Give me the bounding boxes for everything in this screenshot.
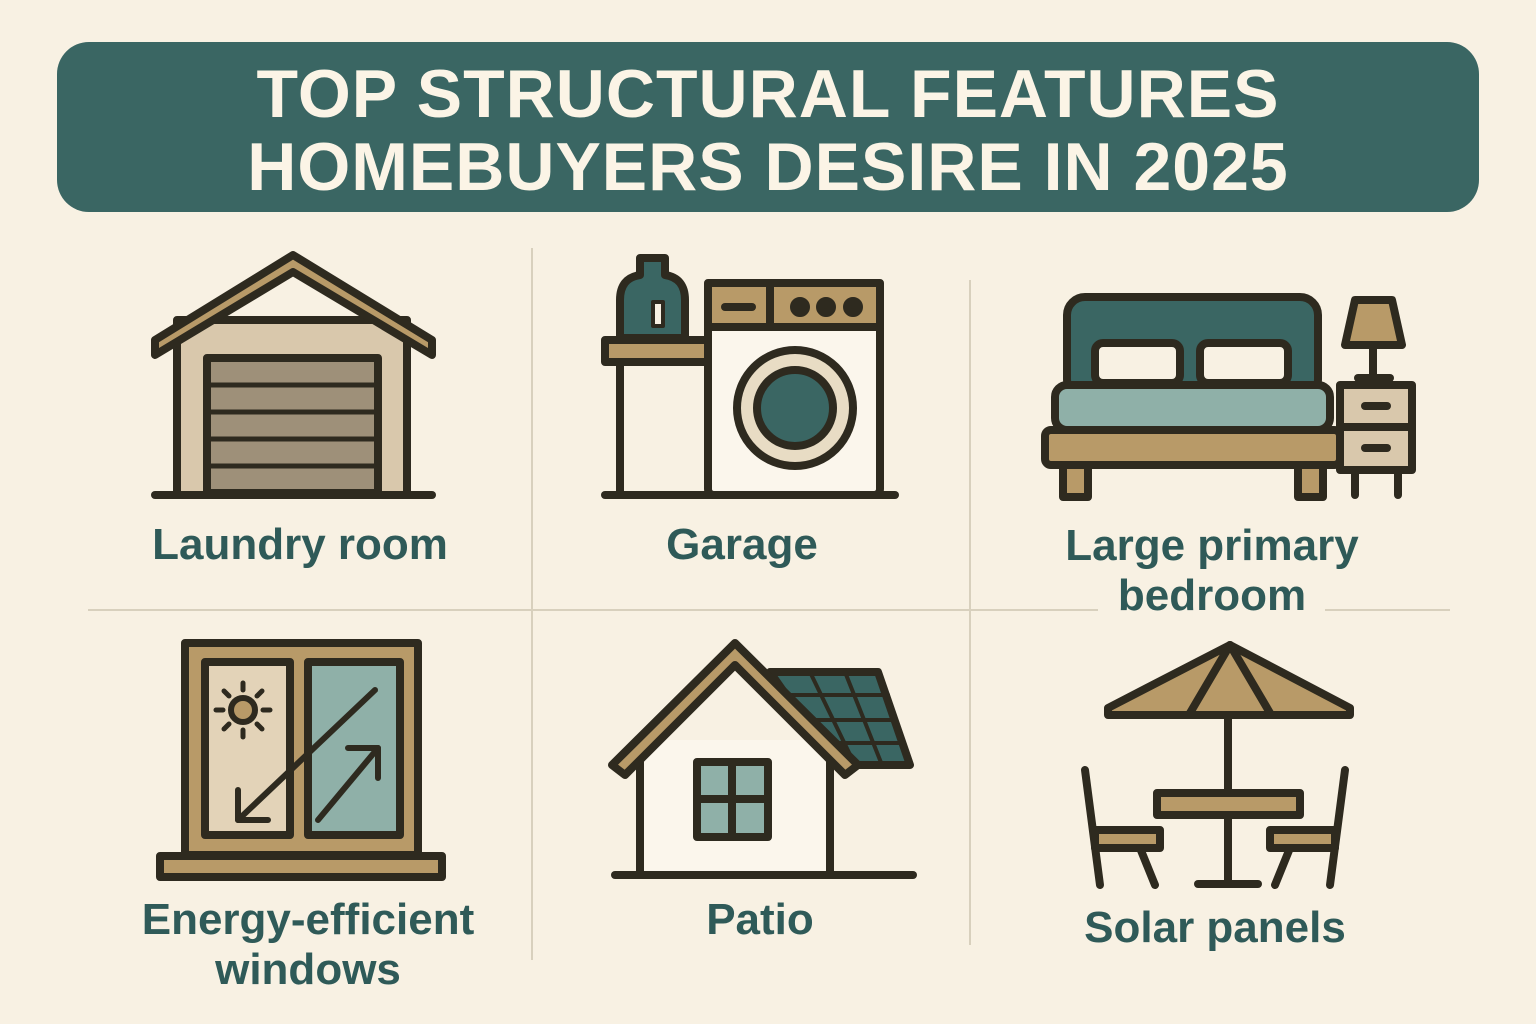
label: solar panels: Solar panels — [1084, 903, 1346, 952]
icon: garage — [155, 255, 432, 495]
label: garage: Garage — [666, 520, 818, 569]
title: TOP STRUCTURAL FEATURES — [257, 56, 1279, 132]
icon: washer — [605, 258, 895, 495]
label: laundry room: Laundry room — [152, 520, 448, 569]
icon: patio — [1085, 645, 1350, 885]
label: patio: Patio — [706, 895, 814, 944]
label: energy-efficient windows — [142, 895, 474, 994]
title: HOMEBUYERS DESIRE IN 2025 — [247, 129, 1289, 205]
title — [57, 42, 1479, 212]
label: large primary bedroom: bedroom — [1118, 571, 1306, 620]
icon: bedroom — [1045, 297, 1412, 497]
label: energy-efficient windows: Energy-efficient — [142, 895, 474, 944]
label: large primary bedroom: Large primary — [1065, 521, 1359, 570]
icon: window — [160, 643, 442, 877]
label: large primary bedroom — [1065, 521, 1359, 620]
icon: house with solar — [612, 643, 913, 875]
label: energy-efficient windows: windows — [215, 945, 401, 994]
